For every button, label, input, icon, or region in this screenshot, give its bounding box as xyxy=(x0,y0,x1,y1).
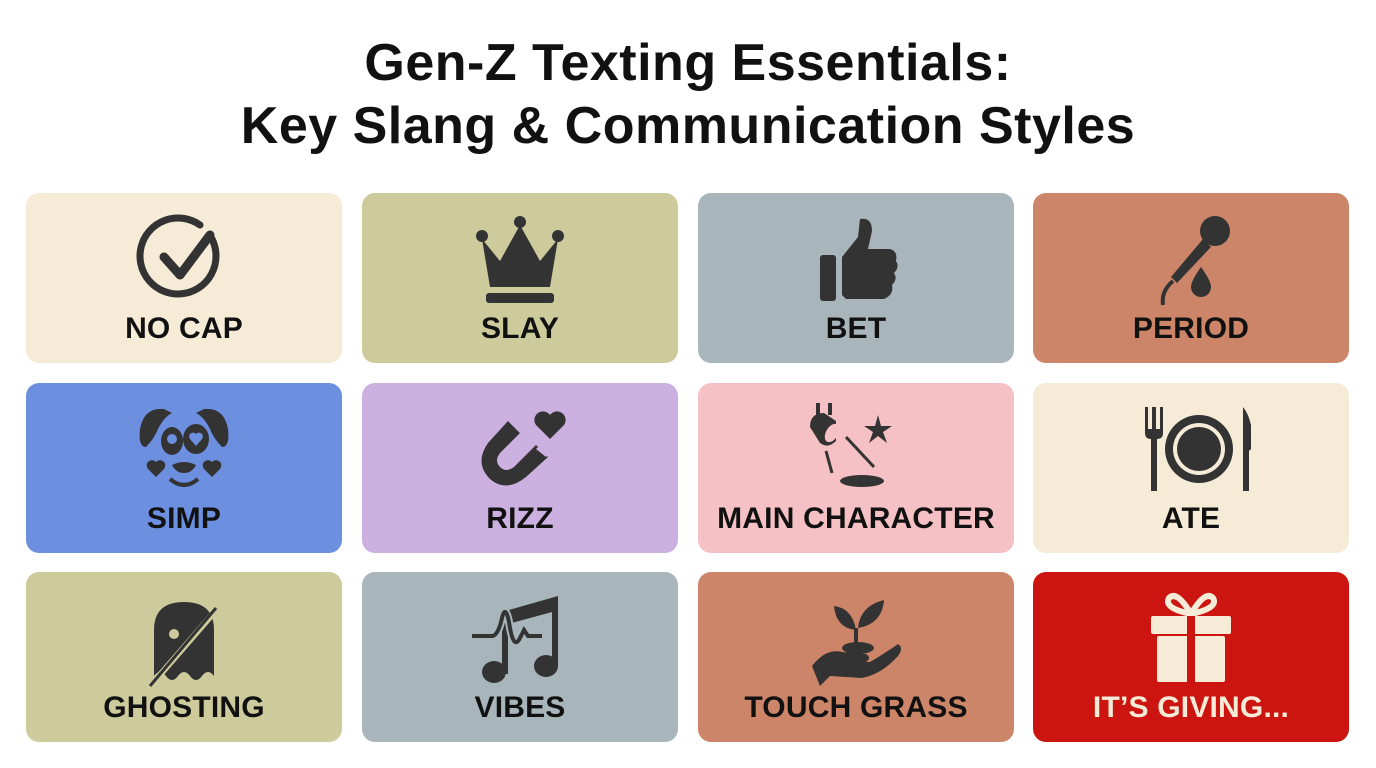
card: main character xyxy=(698,383,1014,553)
icon: plate and cutlery xyxy=(1145,407,1251,491)
icon: thumbs up xyxy=(820,218,898,301)
card: simp xyxy=(26,383,342,553)
label: GHOSTING xyxy=(103,691,265,724)
label: PERIOD xyxy=(1133,312,1249,345)
icon: puppy with hearts xyxy=(140,408,228,488)
label: ATE xyxy=(1162,502,1220,535)
icon: crossed ghost xyxy=(148,602,218,687)
card: touch grass xyxy=(698,572,1014,742)
label: NO CAP xyxy=(125,312,243,345)
card: vibes xyxy=(362,572,678,742)
label: RIZZ xyxy=(486,502,554,535)
icon: spotlight and star xyxy=(810,403,892,487)
card: ate xyxy=(1033,383,1349,553)
label: SIMP xyxy=(147,502,221,535)
card: bet xyxy=(698,193,1014,363)
card: ghosting xyxy=(26,572,342,742)
icon: magnet heart xyxy=(481,411,566,486)
icon: hand holding sprout xyxy=(812,600,901,686)
icon: crown xyxy=(476,216,564,303)
icon: microphone xyxy=(1160,216,1230,306)
card: no cap xyxy=(26,193,342,363)
label: IT’S GIVING... xyxy=(1093,691,1289,724)
label: BET xyxy=(826,312,886,345)
card: it's giving xyxy=(1033,572,1349,742)
label: VIBES xyxy=(474,691,566,724)
icon: music note with wave xyxy=(472,596,558,683)
label: MAIN CHARACTER xyxy=(717,502,995,535)
icon: check circle xyxy=(136,214,220,298)
icon: gift box xyxy=(1151,592,1231,682)
card: rizz xyxy=(362,383,678,553)
card: slay xyxy=(362,193,678,363)
card: period xyxy=(1033,193,1349,363)
title: Key Slang & Communication Styles xyxy=(241,97,1135,155)
label: SLAY xyxy=(481,312,559,345)
title xyxy=(241,34,1135,155)
title: Gen-Z Texting Essentials: xyxy=(364,34,1012,92)
label: TOUCH GRASS xyxy=(744,691,968,724)
